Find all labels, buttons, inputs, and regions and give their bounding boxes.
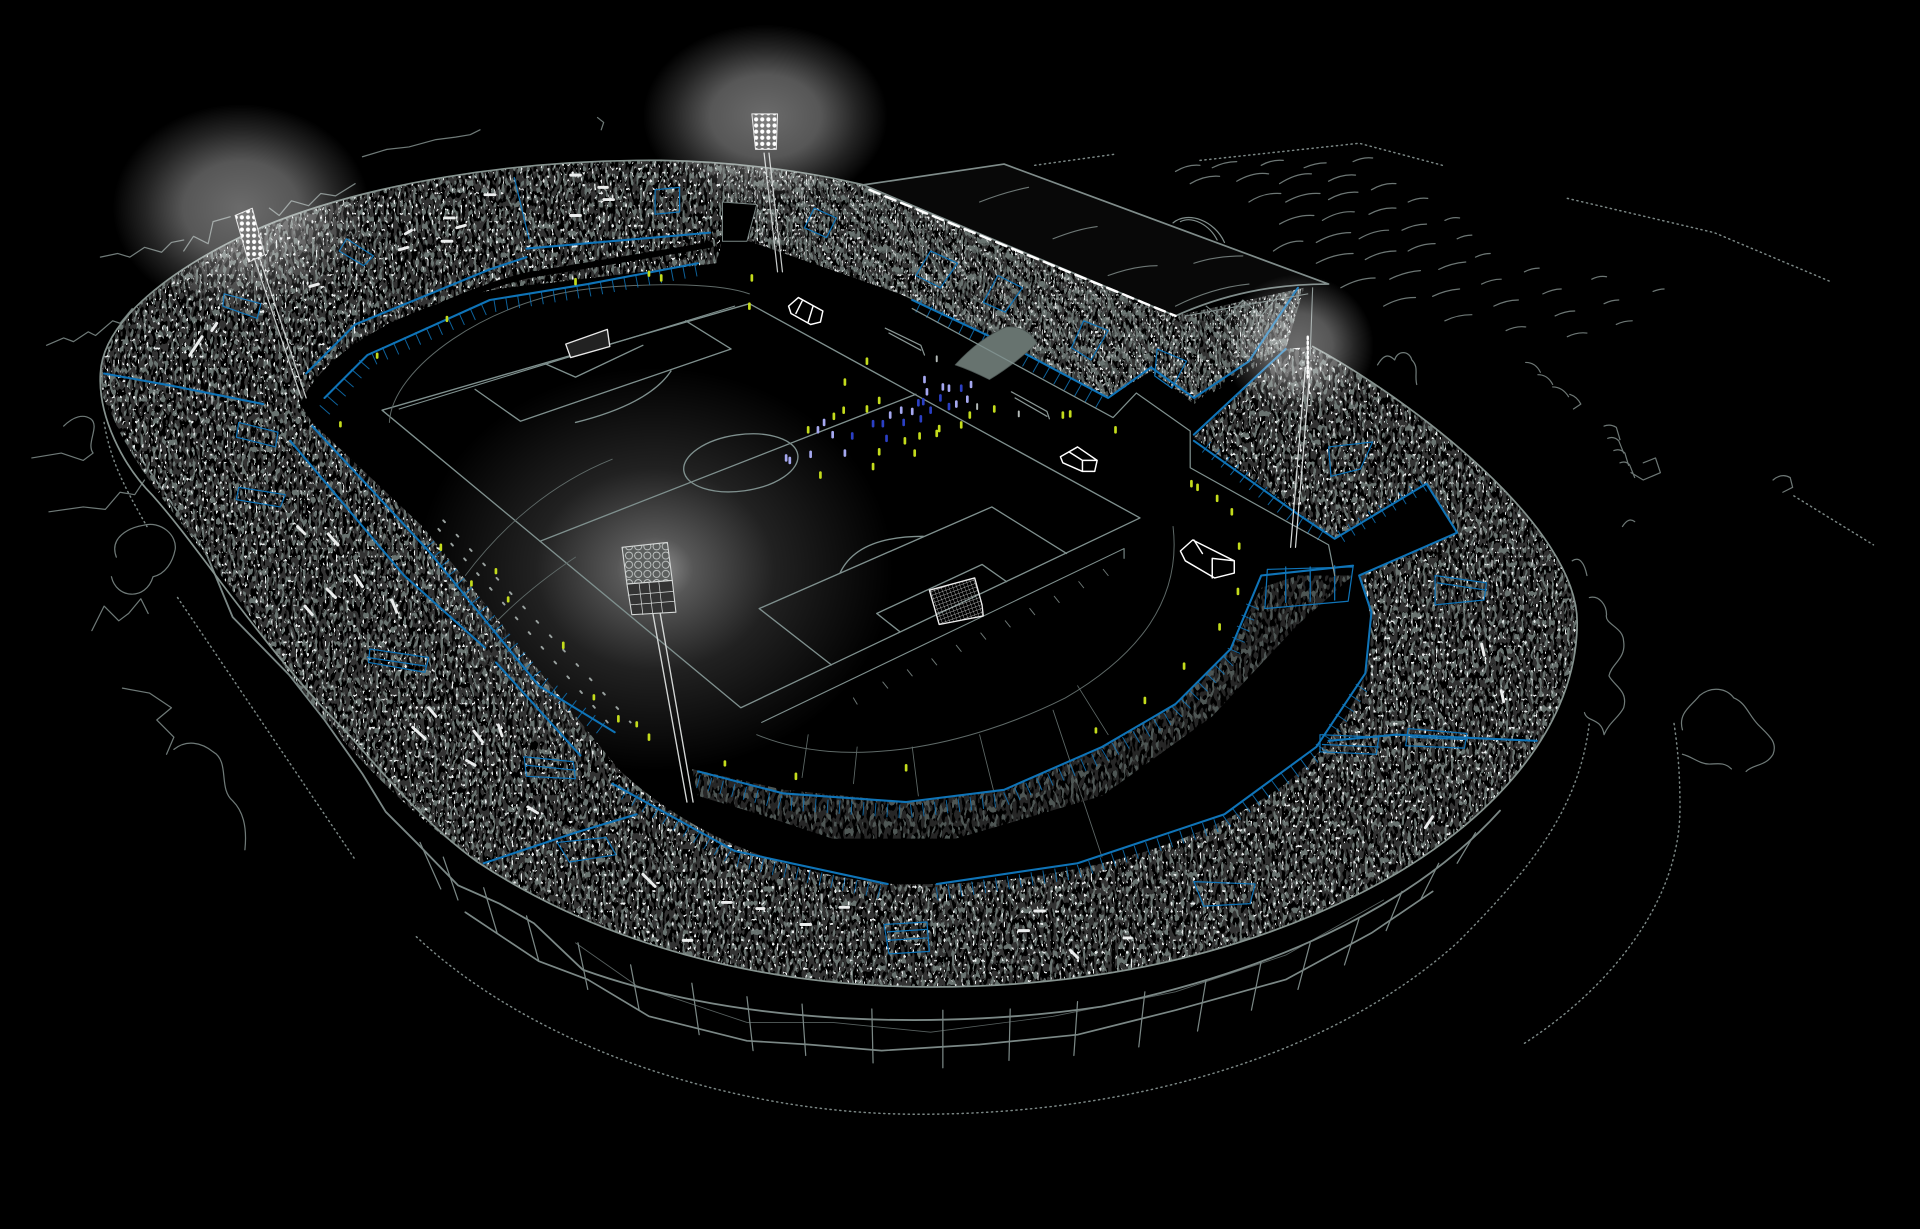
stair blocks — [223, 178, 1487, 954]
penalty box near — [759, 507, 1067, 665]
pitch boundary — [382, 304, 1140, 708]
van top — [789, 298, 823, 324]
floodlight towers — [235, 114, 1310, 802]
parking area car outlines — [1176, 158, 1664, 337]
officials in grey — [937, 356, 1019, 416]
thin inner wavy ring — [576, 900, 1384, 1032]
roof panel — [863, 164, 1329, 316]
rail posts — [325, 269, 1427, 894]
banners held by fans — [190, 175, 1504, 958]
pitch — [382, 285, 1174, 857]
roof highlights — [980, 187, 1249, 306]
stadium rim — [100, 160, 1577, 987]
floodlight north-west — [235, 208, 306, 398]
van bottom — [1180, 540, 1234, 578]
near goal — [929, 578, 983, 624]
rail lines — [104, 233, 1537, 884]
tent — [955, 327, 1037, 380]
tree outlines right — [1681, 689, 1774, 771]
blue players — [852, 386, 961, 441]
track tick marks — [853, 569, 1108, 704]
roof truss — [1185, 288, 1313, 355]
grandstand roof — [863, 164, 1329, 355]
tier gap — [321, 245, 710, 389]
van middle — [1060, 447, 1097, 471]
parking rows right — [1526, 362, 1793, 527]
stewards in yellow — [340, 272, 1239, 779]
trees and hedges — [32, 118, 1774, 850]
running track lines — [399, 306, 1124, 722]
sparse crowd beside the left rail — [438, 520, 631, 735]
floodlight south — [622, 542, 693, 802]
players in purple and blue — [786, 356, 1019, 463]
floodlight glow on pitch — [416, 367, 894, 771]
blue safety rails — [104, 178, 1537, 954]
benches — [885, 328, 1049, 419]
brighter grandstand crowd — [722, 166, 1304, 404]
floodlight east — [1291, 337, 1310, 547]
main seating bowl crowd — [101, 161, 1576, 986]
outer stadium structure — [129, 441, 1500, 1068]
far goal — [566, 329, 610, 358]
floodlight north — [752, 114, 782, 272]
lower wavy ring — [465, 891, 1433, 1051]
tunnel opening — [722, 202, 757, 241]
purple players — [786, 377, 971, 463]
glow north — [643, 24, 888, 208]
halfway line — [540, 394, 916, 541]
floodlight glows — [113, 24, 1374, 416]
vehicles — [789, 298, 1234, 578]
support columns — [420, 833, 1476, 1068]
second roof ring — [129, 441, 1500, 1020]
tree outlines left — [47, 118, 604, 345]
penalty box far — [475, 321, 731, 422]
lower bowl crowd — [692, 576, 1351, 839]
glow north-west — [113, 104, 370, 312]
crowd — [101, 161, 1576, 986]
centre circle — [680, 427, 802, 499]
roof front lights — [869, 190, 1176, 316]
arch behind roof — [1173, 218, 1224, 242]
dotted site boundaries — [104, 143, 1873, 1114]
glow east — [1222, 274, 1374, 416]
stand base lines — [912, 309, 1335, 576]
